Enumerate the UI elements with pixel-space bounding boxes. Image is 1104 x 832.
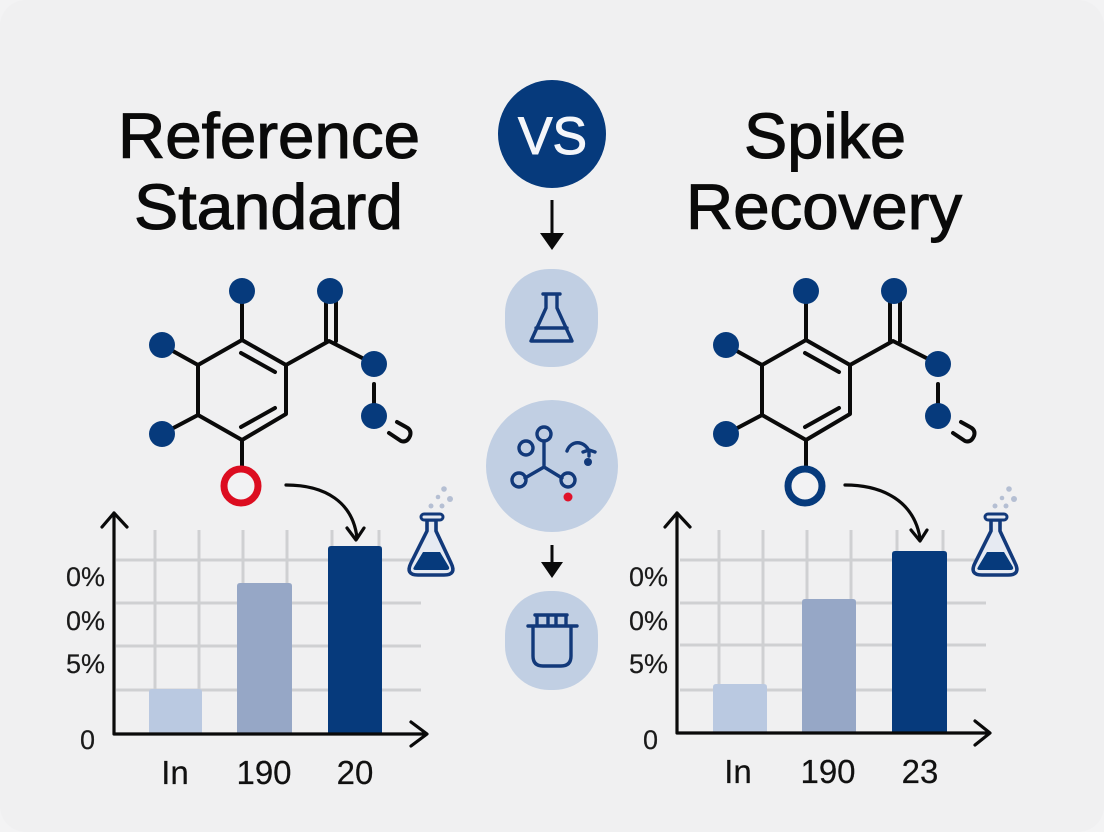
y-axis labels [629, 562, 668, 755]
bar: 20 [328, 546, 382, 734]
bar: 23 [892, 551, 947, 733]
x-axis labels: 23 [902, 753, 938, 790]
y-axis labels [66, 562, 105, 755]
arrow: right molecule to bar [845, 485, 927, 541]
heading: Spike Recovery: Recovery [686, 171, 962, 243]
icon: beaker step [505, 591, 598, 690]
x-axis labels: In [161, 754, 189, 791]
icon: molecule step [486, 400, 618, 532]
y-axis labels: 0% [66, 562, 105, 592]
icon: right flask with bubbles [973, 486, 1017, 575]
bar: 190 [237, 583, 292, 734]
icon: flask step [505, 269, 598, 367]
y-axis labels: 0% [66, 606, 105, 636]
bar: In [149, 689, 202, 734]
x-axis labels [724, 753, 938, 790]
y-axis labels: 0 [80, 725, 95, 755]
x-axis labels: 190 [800, 753, 856, 790]
x-axis labels: In [724, 753, 752, 790]
arrow: VS to flask step [540, 200, 564, 250]
bar chart: reference standard [66, 513, 427, 791]
x-axis labels: 190 [236, 754, 292, 791]
bar: In [713, 684, 767, 733]
y-axis labels: 5% [66, 649, 105, 679]
icon: left flask with bubbles [409, 486, 453, 575]
arrow: left molecule to bar [286, 485, 364, 540]
bar: 190 [802, 599, 856, 733]
y-axis labels: 5% [629, 649, 668, 679]
molecule: reference standard [149, 278, 410, 503]
molecule: spike recovery [713, 278, 974, 503]
heading: Reference Standard: Reference [118, 100, 420, 172]
badge: VS: VS [518, 107, 587, 166]
heading: Spike Recovery [686, 100, 962, 243]
badge: VS [498, 80, 606, 188]
y-axis labels: 0 [643, 725, 658, 755]
x-axis labels [161, 754, 373, 791]
arrow: molecule to beaker step [541, 545, 563, 578]
y-axis labels: 0% [629, 562, 668, 592]
x-axis labels: 20 [337, 754, 373, 791]
y-axis labels: 0% [629, 606, 668, 636]
heading: Reference Standard [118, 100, 420, 243]
heading: Spike Recovery: Spike [744, 100, 906, 172]
bar chart: spike recovery [629, 513, 990, 790]
heading: Reference Standard: Standard [134, 171, 403, 243]
